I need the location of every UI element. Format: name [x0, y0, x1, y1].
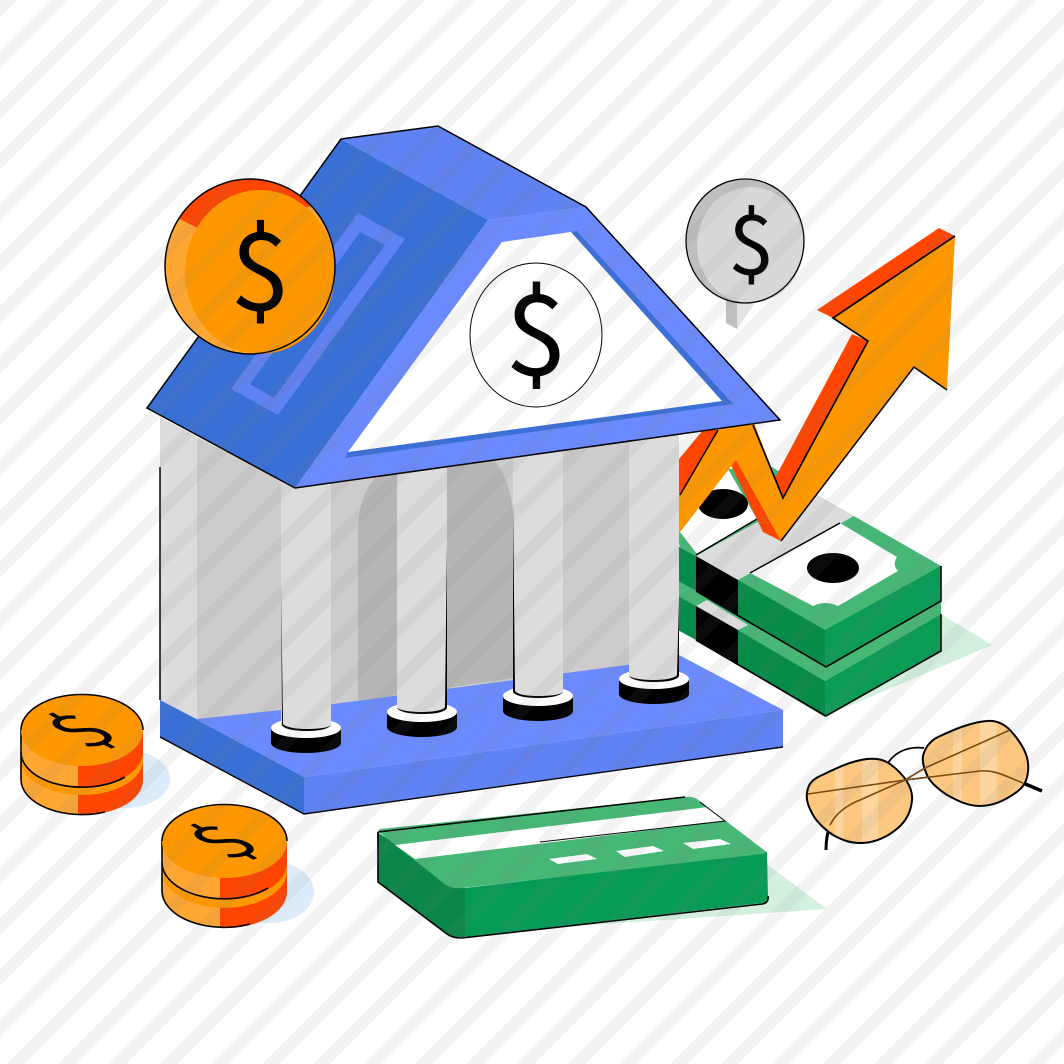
temple arms seen through lenses: [808, 730, 1023, 825]
shadow: lower coin stack: [226, 861, 314, 923]
rising arrow: [670, 228, 955, 545]
roof top face: [341, 126, 586, 220]
roof vent: [231, 213, 405, 415]
front money stack: upper bundle: [696, 492, 941, 667]
banknote centre: [807, 553, 859, 583]
shadow: credit card: [547, 865, 827, 928]
sunglasses: [800, 715, 1042, 850]
temple tips: [1023, 783, 1042, 791]
column 2: [387, 460, 457, 737]
credit card: [377, 797, 768, 938]
card front: [465, 852, 768, 937]
arched doorway: [358, 450, 513, 701]
roof side face: [147, 139, 488, 488]
left lens: [806, 758, 914, 844]
coin stack lower: $: [155, 807, 284, 872]
coin stack left: [13, 695, 143, 815]
coin stack left: $: [13, 696, 142, 761]
grey dollar speech bubble: $: [728, 178, 774, 298]
magnetic strip: [395, 807, 725, 859]
side wall: [160, 417, 281, 719]
bank building: [147, 126, 783, 814]
right lens: [922, 720, 1030, 807]
pediment frame: [295, 207, 780, 488]
plinth: [160, 655, 783, 814]
column 1: [271, 480, 341, 753]
rear money stack: [675, 467, 812, 640]
pediment inner: [348, 232, 722, 452]
large orange dollar coin: $: [230, 186, 290, 342]
grey dollar speech bubble: [686, 178, 804, 329]
bubble tail: [726, 298, 757, 329]
banknote: [750, 523, 898, 606]
pediment dollar medallion: [470, 246, 602, 408]
card side: [377, 832, 465, 937]
bridge: [888, 748, 924, 763]
coin stack lower: [155, 804, 287, 928]
card number dashes: [549, 839, 731, 864]
shadow: money stacks: [826, 614, 992, 716]
column 3: [503, 450, 573, 721]
shadow: left coin stack: [80, 750, 170, 808]
roof: [147, 126, 780, 488]
front money stack: lower bundle: [696, 540, 941, 717]
back wall: [281, 430, 679, 711]
pediment trim: [345, 231, 733, 458]
card top: [378, 797, 766, 888]
large orange dollar coin: [160, 170, 340, 354]
pediment dollar medallion: $: [505, 246, 567, 408]
column 4: [619, 430, 689, 704]
